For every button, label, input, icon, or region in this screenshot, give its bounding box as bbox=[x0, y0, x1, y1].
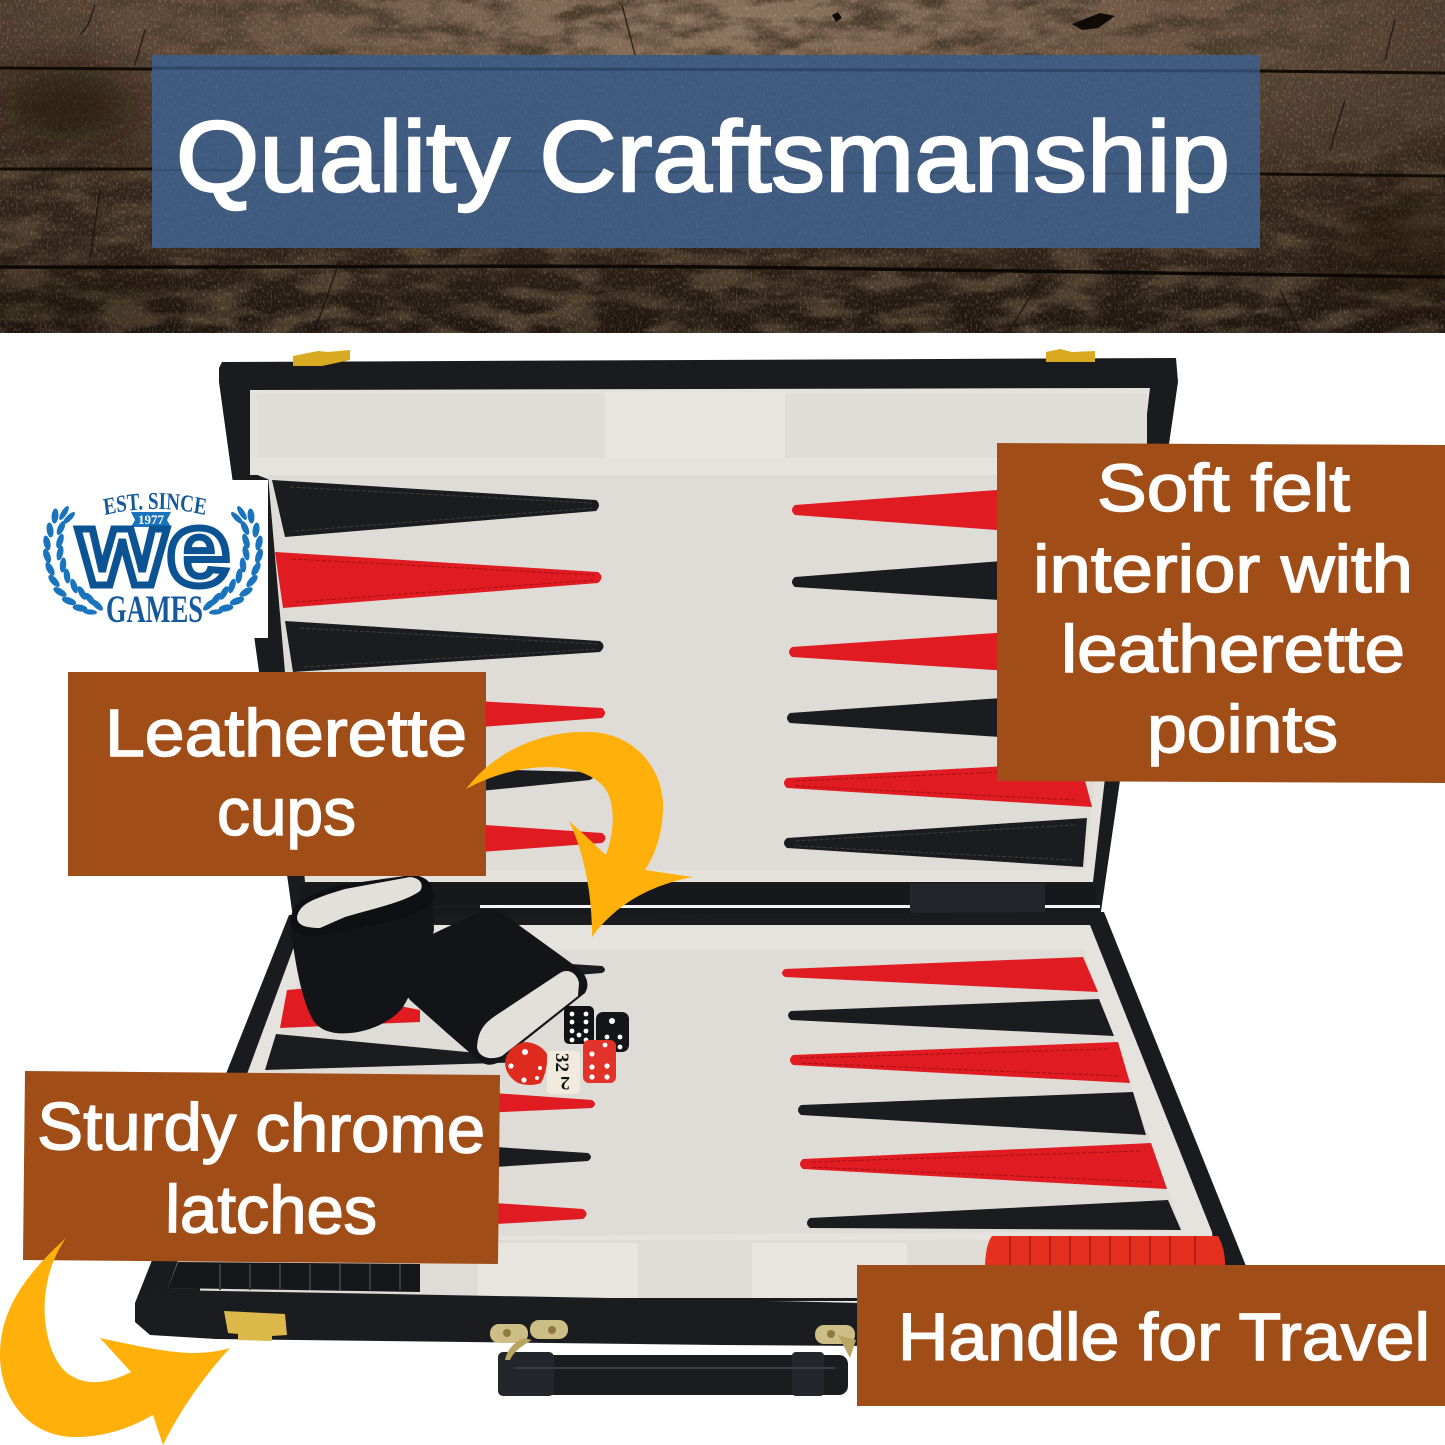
right points upper bbox=[784, 489, 1092, 867]
laurel wreath right bbox=[201, 505, 265, 615]
dice bbox=[505, 1006, 629, 1094]
lower case leather bbox=[135, 912, 1246, 1303]
travel handle bbox=[498, 1346, 848, 1396]
left points lower bbox=[265, 962, 605, 1225]
front rail bbox=[135, 1290, 865, 1346]
callout: sturdy chrome latches: latches bbox=[165, 1172, 377, 1249]
black checkers bbox=[168, 1262, 420, 1292]
doubling cube bbox=[547, 1051, 580, 1094]
red die right bbox=[583, 1040, 616, 1083]
backgammon board: upper half bbox=[219, 349, 1178, 925]
callout: soft felt interior: leatherette bbox=[1061, 612, 1405, 687]
doubling cube: 32 bbox=[551, 1053, 572, 1072]
wood banner background bbox=[0, 0, 1445, 333]
callout: leatherette cups bbox=[68, 672, 486, 876]
laurel wreath left bbox=[41, 505, 105, 615]
doubling cube: 2 bbox=[560, 1072, 570, 1093]
arrow: to cups bbox=[466, 732, 693, 937]
red checkers bbox=[985, 1236, 1225, 1270]
callout: soft felt interior: points bbox=[1147, 692, 1338, 767]
dice cup 1 bbox=[290, 875, 434, 1033]
callout: handle for travel bbox=[857, 1265, 1445, 1406]
callout: leatherette cups: cups bbox=[217, 775, 356, 850]
black die front bbox=[564, 1006, 594, 1044]
upper case leather bbox=[219, 358, 1178, 918]
brass clasp left bbox=[490, 1320, 568, 1360]
felt walls bbox=[250, 388, 1150, 882]
est since text: EST. SINCE bbox=[102, 492, 206, 515]
callout: soft felt interior: Soft felt bbox=[1097, 451, 1350, 526]
felt playing surface bbox=[205, 950, 1182, 1238]
arrow: to latch bbox=[0, 1238, 230, 1445]
felt walls bbox=[168, 925, 1220, 1295]
callout: sturdy chrome latches: Sturdy chrome bbox=[37, 1089, 485, 1168]
title text: Quality Craftsmanship bbox=[176, 101, 1230, 213]
chrome latch left bbox=[224, 1311, 287, 1341]
callout: soft felt interior bbox=[997, 443, 1445, 783]
title banner bbox=[152, 55, 1260, 248]
left points upper bbox=[272, 480, 606, 855]
storage tray bbox=[200, 1240, 1210, 1298]
callout: handle for travel: Handle for Travel bbox=[898, 1300, 1430, 1375]
1977 badge: 1977 bbox=[138, 512, 164, 527]
backgammon board: lower half bbox=[135, 912, 1246, 1396]
brass clasp right bbox=[815, 1325, 856, 1358]
red die left bbox=[505, 1042, 547, 1085]
hinge band bbox=[300, 883, 1100, 925]
right points lower bbox=[782, 957, 1181, 1230]
callout: sturdy chrome latches bbox=[23, 1071, 500, 1264]
storage tray bbox=[250, 392, 1147, 475]
callout: soft felt interior: interior with bbox=[1033, 532, 1413, 607]
1977 badge bbox=[131, 512, 171, 527]
games text: GAMES bbox=[106, 589, 203, 631]
dice cup 2 bbox=[398, 910, 587, 1065]
black die back bbox=[596, 1012, 629, 1052]
felt playing surface bbox=[268, 475, 1128, 870]
callout: leatherette cups: Leatherette bbox=[105, 696, 467, 771]
we wordmark: we bbox=[77, 490, 230, 608]
brass hinges top bbox=[293, 349, 1095, 366]
logo: WE Games bbox=[43, 480, 268, 638]
